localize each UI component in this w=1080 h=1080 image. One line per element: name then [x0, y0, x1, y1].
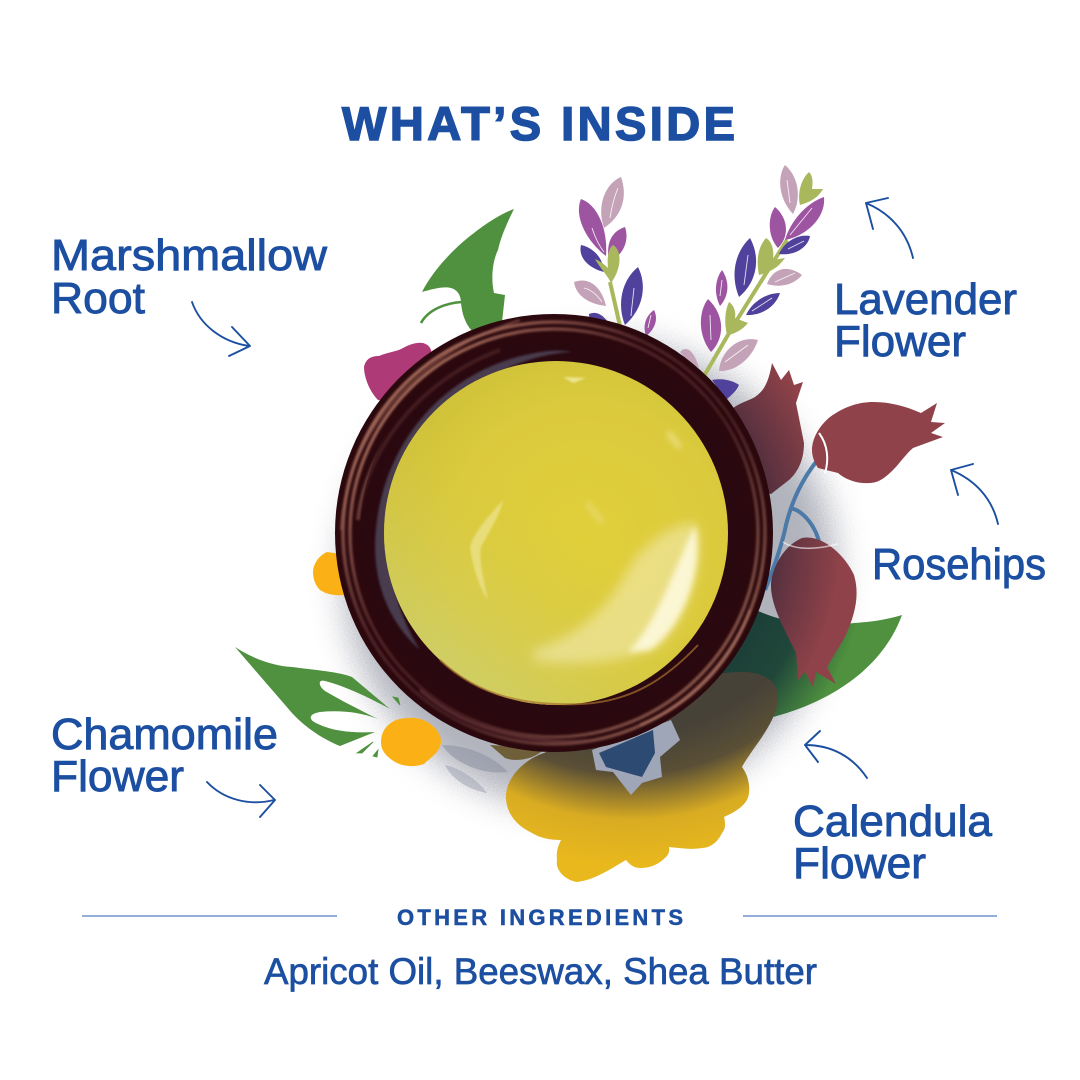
divider: left	[82, 915, 337, 917]
label: marshmallow root	[51, 231, 327, 323]
soft jar shadow	[344, 339, 836, 811]
label: rosehips: Rosehips	[872, 540, 1046, 589]
illustration: rosehip right	[812, 402, 945, 483]
illustration: bottom leaf	[715, 605, 902, 717]
text: other ingredient list: Apricot Oil, Beeswax, Shea Butter	[264, 951, 817, 992]
label: lavender flower	[834, 275, 1017, 366]
product jar	[335, 314, 773, 752]
illustration: rosehip stem	[765, 462, 820, 590]
title: WHAT’S INSIDE	[342, 97, 735, 150]
heading: other ingredients: OTHER INGREDIENTS	[397, 905, 683, 930]
label: chamomile flower: Chamomile	[51, 710, 278, 759]
illustration: rosehip top	[733, 363, 804, 494]
inner glass wall	[375, 351, 572, 650]
balm surface	[384, 361, 728, 705]
illustration: rosehip lower	[771, 538, 857, 687]
illustration: chamomile leaf	[235, 647, 400, 757]
jar outer rim	[335, 314, 773, 752]
label: calendula flower: Calendula	[793, 797, 993, 846]
label: chamomile flower	[51, 710, 278, 801]
small highlights	[470, 500, 503, 600]
label: marshmallow root: Marshmallow	[51, 231, 327, 280]
arrow: lavender flower	[866, 198, 913, 258]
arrow: chamomile flower	[207, 782, 275, 817]
arrow: calendula flower	[805, 731, 867, 778]
arrow: rosehips	[951, 464, 998, 524]
illustration: small chamomile bud	[313, 552, 348, 595]
label: lavender flower: Flower	[834, 317, 966, 366]
arrow: marshmallow root	[192, 302, 250, 356]
balm highlight	[533, 522, 699, 664]
illustration: calendula flower	[490, 672, 778, 882]
divider: right	[743, 915, 997, 917]
label: lavender flower: Lavender	[834, 275, 1017, 324]
label: calendula flower: Flower	[793, 839, 926, 888]
label: chamomile flower: Flower	[51, 752, 184, 801]
label: marshmallow root: Root	[51, 274, 145, 323]
illustration: marshmallow leaf	[421, 209, 514, 331]
illustration: right lavender sprig	[680, 165, 824, 400]
illustration: marshmallow root bloom	[364, 343, 431, 402]
rim highlights	[341, 320, 765, 744]
illustration: left lavender sprig	[574, 177, 656, 336]
label: calendula flower	[793, 797, 993, 888]
illustration: chamomile bloom	[381, 718, 441, 766]
illustration: shadowed chamomile petals	[442, 745, 508, 793]
